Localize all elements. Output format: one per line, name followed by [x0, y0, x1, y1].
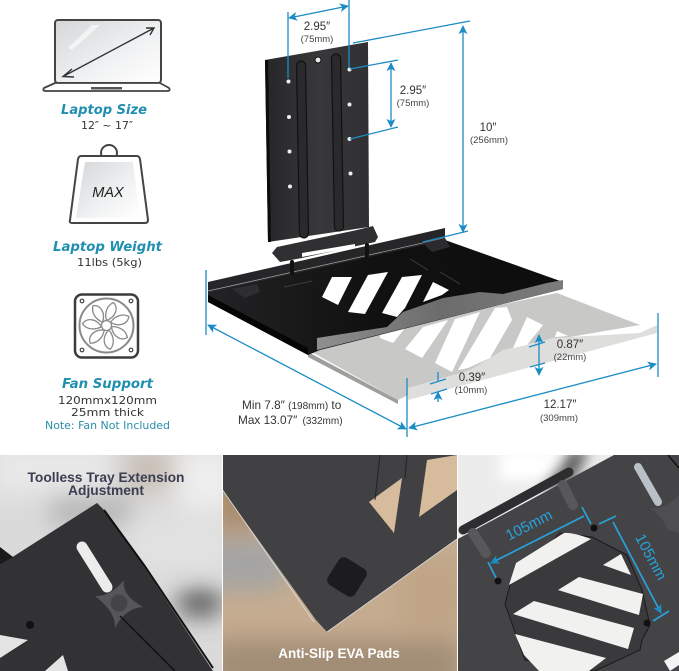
icon: laptop size	[43, 20, 170, 91]
heading: adjustment: Adjustment	[68, 483, 144, 498]
photo: toolless extension	[0, 445, 235, 671]
dimension: tray width: 12.17″	[544, 399, 576, 411]
text: weight value: 11lbs (5kg)	[77, 256, 142, 269]
dimension: tray depth: Max 13.07″ (332mm)	[238, 413, 343, 427]
screw studs	[590, 524, 598, 532]
dimension: 0.87 lip: 0.87″	[557, 339, 583, 351]
dimension: 0.39 lip: 0.39″	[459, 372, 485, 384]
mounting plate	[265, 42, 369, 242]
ghost extended tray	[308, 293, 657, 404]
105mm dimensions: 105mm	[631, 531, 670, 583]
dimension: top width	[288, 0, 349, 78]
105mm dimensions	[488, 507, 670, 621]
text: fan note: Note: Fan Not Included	[45, 419, 170, 432]
icon: fan	[75, 294, 138, 358]
dimension: top width: 2.95″	[304, 21, 330, 33]
dimension: hole spacing: (75mm)	[397, 98, 429, 109]
adjustment slot	[82, 547, 107, 587]
tray underside	[222, 455, 457, 632]
black tray	[208, 228, 563, 355]
dimension: 0.87 lip	[529, 335, 586, 375]
dimension: plate height: (256mm)	[470, 135, 508, 146]
translucent front lip	[317, 280, 563, 350]
heading: toolless tray: Toolless Tray Extension	[28, 470, 184, 485]
dimension: tray width	[409, 313, 658, 428]
dimension: tray depth	[206, 270, 407, 437]
hinge	[272, 226, 378, 273]
dimension: top width: (75mm)	[301, 34, 333, 45]
dimension: 0.87 lip: (22mm)	[554, 352, 586, 363]
slot and knob	[638, 467, 658, 502]
EVA pad	[327, 557, 367, 597]
dimension: tray depth: Min 7.8″ (198mm) to	[242, 398, 342, 412]
dimension: plate height: 10″	[480, 122, 496, 134]
dimension: hole spacing: 2.95″	[400, 85, 426, 97]
hinge bar	[463, 472, 569, 530]
fan cutouts	[505, 533, 650, 671]
photo: anti-slip pads	[223, 455, 457, 671]
heading: laptop size: Laptop Size	[61, 102, 147, 118]
icon: weight	[70, 145, 148, 223]
icon: weight: MAX	[92, 185, 125, 201]
caption: anti-slip: Anti-Slip EVA Pads	[278, 646, 400, 661]
text: fan thickness: 25mm thick	[71, 406, 145, 419]
dimension: 0.39 lip	[430, 372, 487, 402]
tray plate	[0, 503, 213, 671]
plate surface	[456, 455, 679, 671]
dimension: 0.39 lip: (10mm)	[455, 385, 487, 396]
105mm dimensions: 105mm	[503, 507, 555, 544]
photo: fan mount	[456, 450, 679, 671]
text: fan size: 120mmx120mm	[58, 394, 157, 407]
heading: fan support: Fan Support	[62, 376, 154, 392]
knob	[95, 580, 143, 628]
heading: laptop weight: Laptop Weight	[53, 239, 163, 255]
dimension: tray width: (309mm)	[540, 413, 578, 424]
text: laptop size value: 12″ ~ 17″	[81, 119, 133, 132]
dimension: hole spacing	[350, 60, 429, 139]
dimension: plate height	[353, 21, 508, 242]
